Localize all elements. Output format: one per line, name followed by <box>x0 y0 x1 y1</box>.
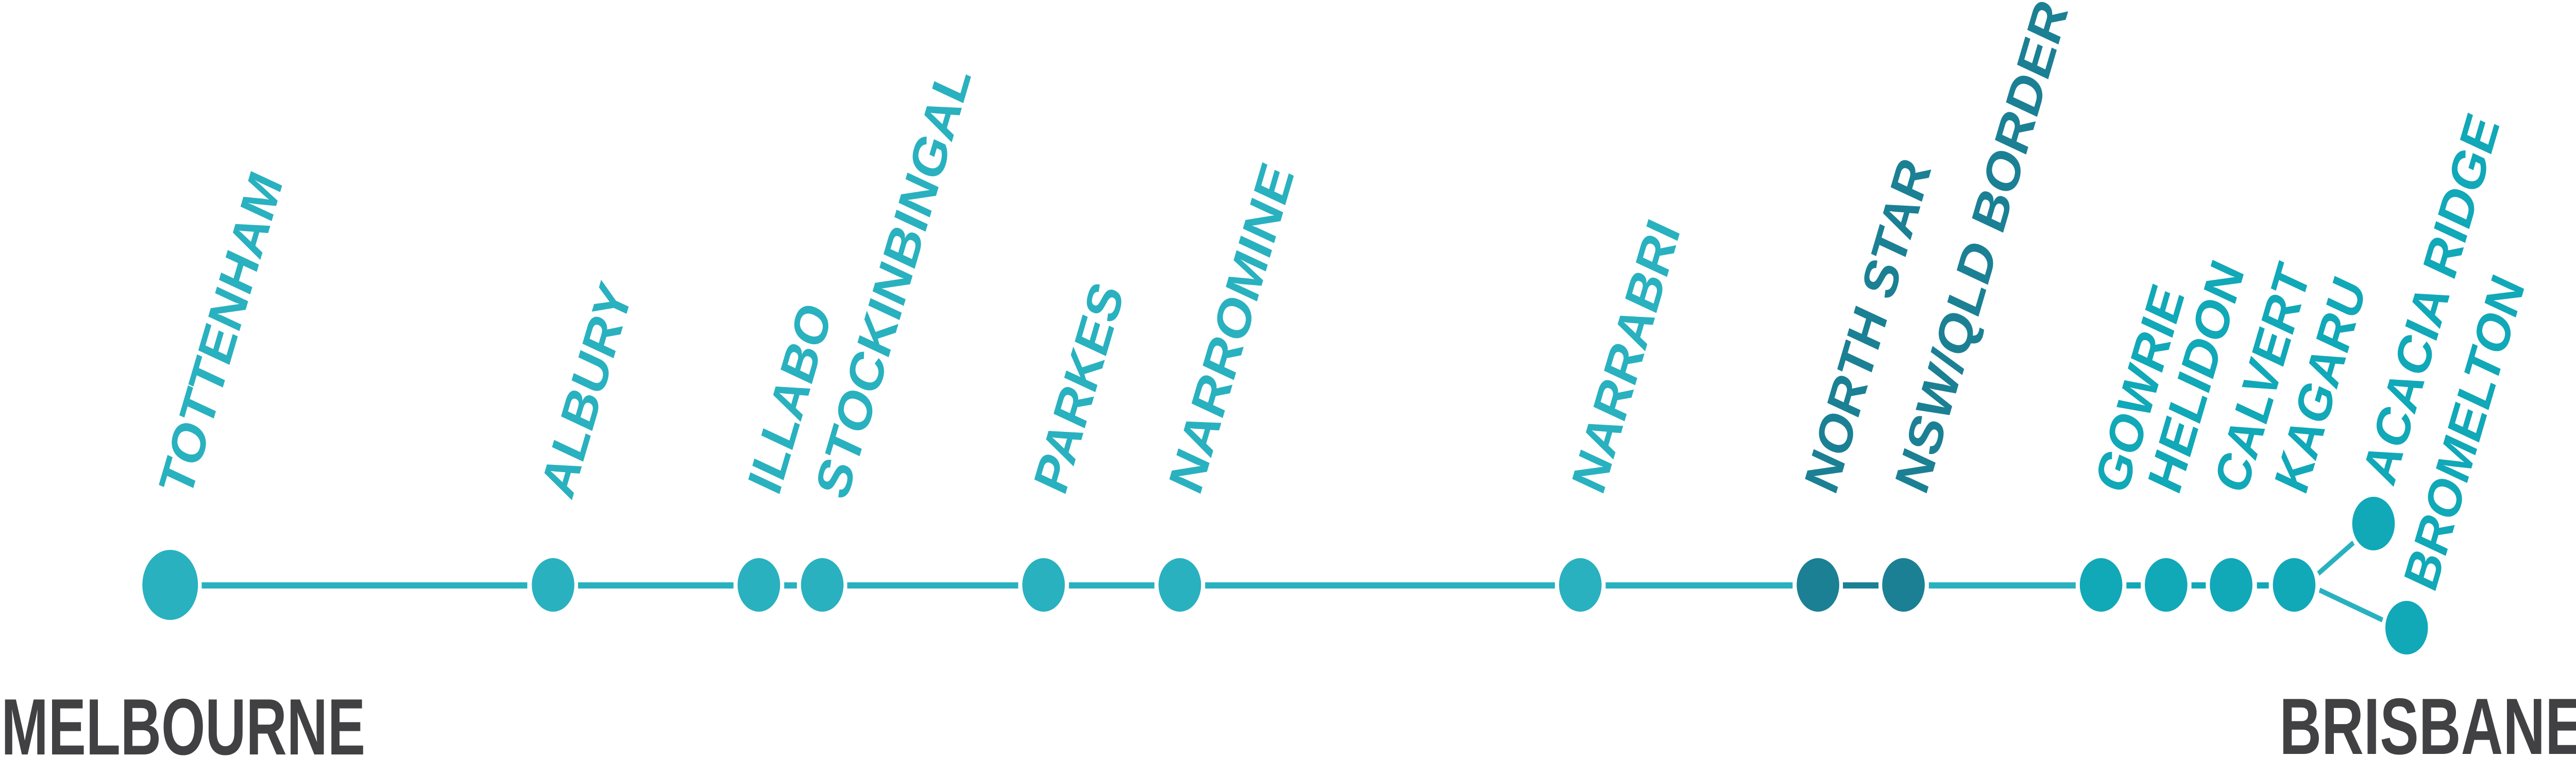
marker: Helidon <box>2145 558 2188 612</box>
label: Acacia Ridge: ACACIA RIDGE <box>2352 105 2510 493</box>
marker: Albury <box>532 558 574 612</box>
marker: NSW/QLD Border <box>1882 558 1925 612</box>
stop: Calvert <box>2205 255 2320 612</box>
marker: Stockinbingal <box>801 558 843 612</box>
marker: Gowrie <box>2080 558 2122 612</box>
label: Tottenham: TOTTENHAM <box>149 163 293 505</box>
stop: Stockinbingal <box>801 56 981 612</box>
marker: Parkes <box>1022 558 1065 612</box>
stop: Gowrie <box>2080 276 2195 612</box>
marker: Kagaru <box>2273 558 2315 612</box>
stop: Narrabri <box>1559 211 1690 612</box>
label: Bromelton: BROMELTON <box>2394 266 2535 599</box>
label: Stockinbingal: STOCKINBINGAL <box>805 56 981 507</box>
heading: Melbourne: MELBOURNE <box>1 682 365 771</box>
label: Helidon: HELIDON <box>2138 252 2255 501</box>
stop: Kagaru <box>2264 268 2377 612</box>
label: Narrabri: NARRABRI <box>1562 211 1690 501</box>
stop: Bromelton <box>2385 266 2535 654</box>
stop: North Star <box>1794 149 1941 612</box>
marker: Bromelton <box>2385 601 2428 654</box>
label: Parkes: PARKES <box>1024 274 1134 502</box>
stop: NSW/QLD Border <box>1882 0 2078 612</box>
stop: Albury <box>531 275 642 612</box>
marker: Calvert <box>2210 558 2252 612</box>
marker: Acacia Ridge <box>2352 497 2395 550</box>
label: Illabo: ILLABO <box>738 294 842 502</box>
marker: Tottenham <box>142 550 198 620</box>
label: North Star: NORTH STAR <box>1794 149 1941 501</box>
stop: Acacia Ridge <box>2352 105 2510 550</box>
stop: Tottenham <box>142 163 293 620</box>
label: NSW/QLD Border: NSW/QLD BORDER <box>1885 0 2078 501</box>
marker: Narromine <box>1159 558 1201 612</box>
stop: Illabo <box>738 294 842 612</box>
stop: Helidon <box>2138 252 2255 612</box>
stop: Parkes <box>1022 274 1134 612</box>
marker: North Star <box>1797 558 1839 612</box>
label: Kagaru: KAGARU <box>2264 268 2377 501</box>
stop: Narromine <box>1159 155 1304 612</box>
label: Narromine: NARROMINE <box>1159 155 1304 502</box>
heading: Brisbane: BRISBANE <box>2279 682 2576 771</box>
marker: Narrabri <box>1559 558 1602 612</box>
marker: Illabo <box>738 558 780 612</box>
label: Gowrie: GOWRIE <box>2085 276 2195 501</box>
label: Albury: ALBURY <box>531 275 642 506</box>
label: Calvert: CALVERT <box>2205 255 2320 501</box>
route line segments <box>201 543 2382 620</box>
